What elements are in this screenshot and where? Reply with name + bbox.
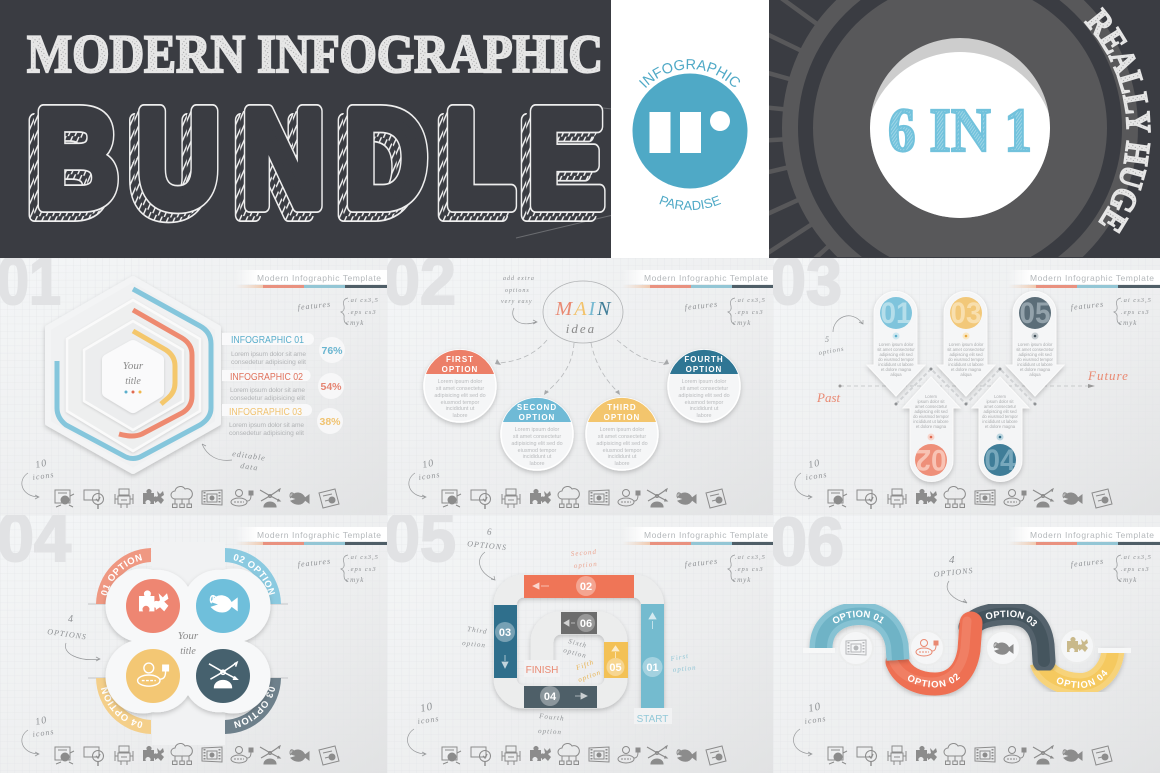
features note: .eps cs3	[348, 309, 377, 316]
end caps	[803, 648, 1131, 653]
circle: first option: eiusmod tempor	[441, 400, 480, 406]
label 01	[222, 333, 345, 366]
features note	[297, 297, 379, 327]
note: third option: option	[462, 639, 486, 649]
timeline past to future: Past	[816, 390, 840, 405]
note: 6 options: 6	[487, 527, 492, 537]
arrow 02: et dolore magna	[916, 424, 947, 429]
note: 6 options	[467, 527, 507, 580]
panel 04: four circles	[0, 515, 387, 773]
note: 10 icons: 10	[419, 700, 434, 715]
arrow 04: ipsum dolor sit	[986, 399, 1014, 404]
arrow 01: do eiusmod tempor	[878, 357, 915, 362]
arrow 04: amet consectetur	[984, 404, 1017, 409]
circle: fourth option: OPTION	[686, 365, 722, 374]
circle: fourth option: eiusmod tempor	[685, 400, 724, 406]
ribbon 04 option: 04 OPTION	[100, 687, 142, 728]
label 02: consedetur adipisicing elit	[230, 395, 305, 402]
note: 10 icons	[409, 458, 441, 499]
segment 03: 03	[499, 627, 511, 639]
panel 05: spiral path	[384, 500, 774, 773]
features note: .ai cs3,5	[1121, 554, 1152, 561]
arrow 05: adipiscing elit sed	[1018, 352, 1052, 357]
note: sixth option: option	[562, 646, 588, 660]
template header	[1008, 270, 1160, 288]
features note: .ai cs3,5	[735, 297, 766, 304]
label 02: INFOGRAPHIC 02	[230, 372, 303, 383]
arrow 05	[1006, 292, 1064, 396]
label 01: Lorem ipsum dolor sit ame	[231, 351, 306, 358]
note: sixth option	[562, 637, 588, 660]
circle: third option: eiusmod tempor	[603, 448, 642, 454]
circle: second option: labore	[530, 461, 544, 467]
panel 06: wave path	[773, 516, 1160, 773]
circle: first option: labore	[452, 413, 468, 419]
label 02: Lorem ipsum dolor sit ame	[230, 387, 305, 394]
main idea bubble: idea	[566, 321, 596, 336]
features note: cmyk	[733, 319, 751, 327]
segment 06	[561, 612, 597, 634]
features note: cmyk	[1119, 576, 1137, 584]
start tag	[634, 708, 672, 725]
circle: third option: adipisicing elit sed do	[596, 441, 648, 447]
label 03: INFOGRAPHIC 03	[229, 407, 302, 418]
label 03: consedetur adipisicing elit	[229, 430, 304, 437]
note: 10 icons: icons	[805, 470, 828, 482]
icon row	[828, 487, 1112, 509]
panel 02: main idea	[384, 243, 774, 516]
icon disc: fish	[986, 631, 1020, 665]
circle: first option	[424, 350, 496, 422]
circle: second option: eiusmod tempor	[518, 448, 557, 454]
note: 4 options: 4	[949, 554, 956, 566]
arrow 02	[903, 377, 960, 482]
note: 10 icons: 10	[34, 715, 48, 728]
logo panel: infographic paradise	[611, 0, 748, 258]
template header: Modern Infographic Template	[1030, 273, 1154, 283]
note: fifth option: Fifth	[574, 658, 595, 672]
features note: cmyk	[346, 319, 364, 327]
features note	[684, 297, 766, 327]
badge text: 6 IN 1	[888, 97, 1032, 165]
icon disc: film	[839, 631, 873, 665]
center title: Your	[178, 630, 199, 642]
label 02	[222, 370, 344, 402]
features note: .eps cs3	[1121, 309, 1150, 316]
circle: second option: sit amet consectetur	[513, 434, 561, 440]
arrow 01: et dolore magna	[881, 367, 912, 372]
timeline past to future	[817, 372, 1128, 402]
label 01: 76%	[321, 345, 343, 357]
note: 10 icons: 10	[807, 700, 822, 715]
arrow 04	[972, 377, 1029, 482]
arrow 02: ipsum dolor sit	[918, 399, 945, 404]
ring: salmon	[119, 310, 192, 436]
heading: bundle hatched 3D lettering: BUNDLE	[36, 81, 604, 235]
features note: features	[1070, 557, 1105, 569]
arrow 05: incididunt ut labore	[1017, 362, 1053, 367]
logo mark	[650, 111, 730, 153]
template header: Modern Infographic Template	[1030, 530, 1154, 540]
arrow 01: adipiscing elit sed	[879, 352, 913, 357]
wave: option 04	[1029, 653, 1126, 692]
center title: title	[180, 646, 196, 657]
label 02: 54%	[320, 381, 342, 393]
arrow 01: sit amet consectetur	[877, 347, 915, 352]
arrow 03: adipiscing elit sed	[949, 352, 983, 357]
note: sixth option: Sixth	[567, 637, 588, 650]
arrow 03: incididunt ut labore	[948, 362, 984, 367]
arrow 04: 04	[984, 444, 1016, 477]
arrow 05: sit amet consectetur	[1016, 347, 1054, 352]
number 05: 05	[384, 500, 456, 576]
features note: .ai cs3,5	[1121, 297, 1152, 304]
template header: Modern Infographic Template	[257, 530, 381, 540]
features note: cmyk	[733, 576, 751, 584]
heading: bundle hatched 3D lettering: BUNDLE	[31, 86, 599, 240]
circle: arrows	[196, 649, 250, 703]
label 01: consedetur adipisicing elit	[231, 359, 306, 366]
circle: second option: OPTION	[519, 413, 555, 422]
template header	[235, 527, 387, 545]
template header	[1008, 527, 1160, 545]
circle: fourth option	[668, 350, 740, 422]
arrow 04: et dolore magna	[985, 424, 1016, 429]
top banner: 6 in 1 badge	[769, 0, 1160, 258]
arrow 03: aliqua	[960, 372, 972, 377]
finish tag	[524, 660, 560, 677]
arrow 04: do eiusmod tempor	[982, 414, 1019, 419]
wave: option 03: OPTION 03	[986, 610, 1037, 626]
note: 10 icons	[22, 458, 55, 499]
arrow 01: aliqua	[890, 372, 902, 377]
arrow 05: aliqua	[1029, 372, 1041, 377]
logo text	[639, 59, 740, 210]
circle: third option: incididunt ut	[608, 454, 637, 460]
note: first option	[669, 652, 697, 674]
segment 03	[494, 605, 517, 678]
features note: features	[684, 300, 719, 312]
circle: second option	[501, 398, 573, 470]
note: 10 icons: icons	[418, 470, 441, 482]
features note	[684, 554, 766, 584]
features note: features	[297, 557, 332, 569]
note: 4 options	[47, 614, 100, 661]
note: first option: option	[672, 664, 697, 674]
timeline past to future: Future	[1087, 368, 1129, 383]
features note: .ai cs3,5	[348, 554, 379, 561]
features note: cmyk	[346, 576, 364, 584]
segment 04	[524, 686, 597, 708]
segment 02: 02	[580, 581, 592, 593]
circle: fourth option: Lorem ipsum dolor	[682, 379, 727, 385]
circle: third option: OPTION	[604, 413, 640, 422]
center title	[178, 630, 199, 657]
arrow 05: Lorem ipsum dolor	[1018, 342, 1053, 347]
note: 10 icons: 10	[421, 458, 435, 471]
connector zigzag and dots	[894, 368, 1036, 406]
note: add extra options: very easy	[501, 299, 532, 305]
center title	[123, 360, 144, 394]
ribbon 03 option: 03 OPTION	[234, 686, 275, 728]
circle: first option: incididunt ut	[446, 406, 475, 412]
arrow 03: et dolore magna	[951, 367, 982, 372]
segment 06: 06	[580, 618, 592, 630]
features note: features	[1070, 300, 1105, 312]
curved text: really huge: REALLY HUGE	[1084, 6, 1151, 234]
circle: fourth option: FOURTH	[684, 355, 724, 364]
circle: first option: FIRST	[446, 355, 474, 364]
note: 6 options: OPTIONS	[467, 539, 507, 552]
arrow 02: Lorem	[925, 394, 937, 399]
segment 05	[604, 642, 628, 678]
note: 10 icons: icons	[32, 470, 55, 482]
logo circle	[632, 74, 748, 188]
note: fifth option	[574, 658, 602, 684]
arrow 01: 01	[880, 297, 912, 330]
icon disc: plug	[910, 631, 944, 665]
circle: second option: adipisicing elit sed do	[511, 441, 563, 447]
arrow 02: incididunt ut labore	[913, 419, 949, 424]
icon row	[55, 744, 339, 766]
panel 03: arrows timeline	[770, 243, 1160, 516]
wave: option 01: OPTION 01	[832, 610, 884, 624]
circle: first option: sit amet consectetur	[436, 386, 484, 392]
backing strip and ledges	[88, 542, 288, 745]
circle: second option: Lorem ipsum dolor	[515, 427, 560, 433]
note: 10 icons: 10	[34, 458, 48, 471]
hexagon layers	[48, 279, 218, 471]
template header: Modern Infographic Template	[644, 530, 768, 540]
note: 5 options: options	[818, 346, 845, 357]
note: 10 icons	[795, 458, 828, 499]
panel 01: hexagon	[0, 243, 387, 516]
logo text: PARADISE	[659, 196, 722, 210]
circle: fourth option: adipisicing elit sed do	[678, 393, 730, 399]
segment 05: 05	[609, 662, 622, 674]
circle: first option: OPTION	[442, 365, 478, 374]
features note	[1070, 297, 1152, 327]
note: 10 icons: icons	[32, 727, 55, 739]
circle: third option: Lorem ipsum dolor	[600, 427, 645, 433]
wave: option 02	[884, 612, 984, 696]
arrow 02: 02	[916, 443, 946, 476]
main idea bubble: MAIN	[555, 298, 612, 320]
wave: option 03	[956, 604, 1058, 670]
template header	[622, 527, 774, 545]
note: editable data	[202, 444, 266, 473]
note: 5 options	[818, 316, 863, 357]
icon row	[442, 744, 726, 766]
arrow 04: incididunt ut labore	[982, 419, 1018, 424]
arrow 01: incididunt ut labore	[878, 362, 914, 367]
start tag: START	[637, 714, 668, 725]
main idea bubble	[543, 281, 623, 343]
circle: third option: THIRD	[607, 403, 637, 412]
note: add extra options	[501, 276, 537, 324]
note: 5 options: 5	[825, 335, 830, 344]
center title: title	[125, 376, 141, 387]
template header: Modern Infographic Template	[257, 273, 381, 283]
ribbon 02 option	[225, 548, 281, 604]
arrow 03	[937, 292, 995, 396]
template header: Modern Infographic Template	[644, 273, 768, 283]
note: fourth option	[538, 712, 565, 736]
logo text: INFOGRAPHIC	[639, 59, 740, 88]
arrow 04: Lorem	[994, 394, 1006, 399]
label 03: Lorem ipsum dolor sit ame	[229, 422, 304, 429]
ring: blue	[57, 289, 211, 458]
note: second option: Second	[570, 548, 597, 558]
note: add extra options: add extra	[503, 276, 535, 282]
circle: fourth option: sit amet consectetur	[680, 386, 728, 392]
arrow 04: adipiscing elit sed	[983, 409, 1017, 414]
heading: bundle hatched 3D lettering: BUNDLE	[36, 81, 604, 235]
arrow 02: amet consectetur	[915, 404, 948, 409]
ribbon 01 option	[96, 548, 151, 604]
finish tag: FINISH	[526, 665, 558, 676]
features note: .eps cs3	[735, 309, 764, 316]
ribbon 01 option: 01 OPTION	[101, 554, 142, 596]
arrow 03: Lorem ipsum dolor	[949, 342, 984, 347]
number 06: 06	[770, 504, 844, 580]
template header	[235, 270, 387, 288]
note: 10 icons	[407, 700, 440, 756]
wave: option 02: OPTION 02	[908, 674, 960, 688]
segment 01	[641, 604, 664, 708]
arrow 01: Lorem ipsum dolor	[879, 342, 914, 347]
number 03: 03	[770, 243, 842, 319]
heading: bundle hatched 3D lettering: BUNDLE	[27, 90, 595, 244]
dashed connectors	[495, 340, 669, 395]
features note: .eps cs3	[735, 566, 764, 573]
note: 10 icons: icons	[804, 714, 827, 726]
note: first option: First	[669, 652, 690, 663]
icon row	[828, 744, 1112, 766]
arrow 01	[867, 292, 925, 396]
icon row	[55, 487, 339, 509]
circle: third option	[586, 398, 658, 470]
wave: option 01	[808, 604, 911, 664]
spiral track	[505, 586, 652, 708]
circle: second option: SECOND	[517, 403, 557, 412]
note: 10 icons	[793, 700, 827, 756]
circle: first option: Lorem ipsum dolor	[438, 379, 483, 385]
note: 4 options: OPTIONS	[47, 627, 87, 642]
arrow 05: 05	[1020, 297, 1050, 330]
features note: .eps cs3	[348, 566, 377, 573]
note: fifth option: option	[577, 668, 602, 684]
circle: third option: sit amet consectetur	[598, 434, 646, 440]
note: fourth option: Fourth	[538, 712, 565, 723]
segment 02	[524, 575, 634, 598]
note: editable data: data	[240, 461, 259, 473]
note: fourth option: option	[538, 727, 562, 736]
number 02: 02	[384, 243, 456, 319]
note: third option: Third	[467, 625, 488, 636]
arrow 03: 03	[950, 297, 982, 330]
ring: yellow	[133, 331, 175, 404]
note: third option	[462, 625, 488, 649]
circle: first option: adipisicing elit sed do	[434, 393, 486, 399]
circle: third option: labore	[614, 461, 630, 467]
note: editable data: editable	[232, 449, 266, 463]
ribbon 04 option	[96, 678, 151, 734]
circle: fourth option: labore	[696, 413, 712, 419]
icon disc: puzzle	[1060, 629, 1094, 663]
features note	[1070, 554, 1152, 584]
top banner: bundle title	[0, 0, 613, 258]
segment 04: 04	[544, 691, 557, 703]
segment 01: 01	[646, 662, 659, 674]
features note: .ai cs3,5	[348, 297, 379, 304]
template header	[622, 270, 774, 288]
features note: .ai cs3,5	[735, 554, 766, 561]
note: add extra options: options	[505, 288, 530, 294]
arrow 05: do eiusmod tempor	[1017, 357, 1054, 362]
features note: .eps cs3	[1121, 566, 1150, 573]
heading: bundle hatched 3D lettering: BUNDLE	[27, 90, 595, 244]
arrow 05: et dolore magna	[1020, 367, 1051, 372]
note: 10 icons: 10	[807, 458, 821, 471]
features note: cmyk	[1119, 319, 1137, 327]
note: 4 options	[933, 554, 974, 603]
arrow 03: do eiusmod tempor	[948, 357, 985, 362]
heading: modern infographic: MODERN INFOGRAPHIC	[27, 24, 603, 84]
ribbon 03 option	[225, 678, 281, 734]
label 03: 38%	[319, 416, 341, 428]
note: 10 icons	[22, 715, 55, 756]
ribbon 02 option: 02 OPTION	[234, 554, 276, 595]
arrow 03: sit amet consectetur	[947, 347, 985, 352]
label 03	[222, 404, 343, 437]
note: 4 options: OPTIONS	[933, 566, 974, 579]
white clover body	[105, 568, 271, 714]
circle: second option: incididunt ut	[523, 454, 552, 460]
circle: plug	[126, 649, 180, 703]
note: 10 icons: icons	[417, 714, 440, 726]
circle: puzzle	[126, 579, 180, 633]
arrow 02: do eiusmod tempor	[913, 414, 950, 419]
circle: fish	[196, 579, 250, 633]
icon row	[442, 487, 726, 509]
center title: Your	[123, 360, 144, 372]
features note	[297, 554, 379, 584]
arrow 02: adipiscing elit sed	[914, 409, 948, 414]
features note: features	[297, 300, 332, 312]
features note: features	[684, 557, 719, 569]
note: 4 options: 4	[68, 614, 74, 625]
circle: fourth option: incididunt ut	[690, 406, 719, 412]
note: second option	[570, 548, 598, 570]
note: second option: option	[573, 560, 598, 570]
label 01: INFOGRAPHIC 01	[231, 335, 304, 346]
wave: option 04: OPTION 04	[1056, 670, 1108, 688]
